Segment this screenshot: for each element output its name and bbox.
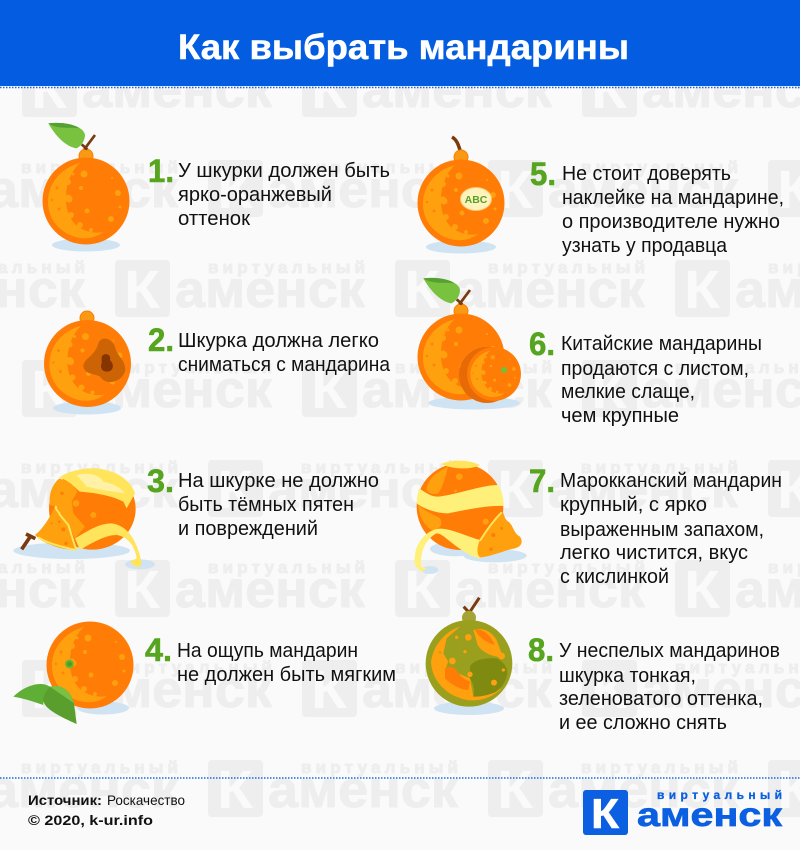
icon: unripe green orange (426, 598, 512, 715)
icon: orange with spiral peel (414, 461, 527, 574)
text 7: выраженным запахом, (560, 518, 764, 541)
text 4: На ощупь мандарин (177, 639, 358, 662)
logo: К (591, 790, 619, 837)
number 1: 1. (148, 153, 174, 189)
text 6: мелкие слаще, (561, 380, 695, 403)
sticker: ABC (465, 194, 488, 206)
number 7: 7. (529, 463, 555, 499)
footer source: Роскачество (107, 792, 185, 808)
icon: orange with leaves (13, 622, 133, 724)
text 2 (178, 329, 391, 376)
text 3: быть тёмных пятен (178, 493, 354, 516)
text 8 (559, 639, 780, 734)
text 5: узнать у продавца (562, 234, 728, 257)
text 4 (177, 639, 396, 686)
text 3: и повреждений (178, 517, 318, 540)
text 6: чем крупные (561, 404, 679, 427)
text 1 (178, 159, 390, 230)
icon: orange with ABC sticker (418, 137, 504, 254)
icon: orange with leaf (42, 123, 130, 252)
text 6 (561, 332, 762, 427)
logo (583, 788, 783, 837)
logo: аменск (637, 796, 783, 833)
text 1: У шкурки должен быть (178, 159, 390, 182)
icon: two oranges with leaf (418, 278, 521, 410)
icon: orange with peel spot (44, 311, 131, 414)
text 5: о производителе нужно (562, 210, 780, 233)
text 6: Китайские мандарины (561, 332, 762, 355)
item 1 (42, 123, 390, 252)
text 5 (562, 162, 784, 257)
text 7: с кислинкой (560, 565, 669, 588)
text 7 (560, 469, 782, 588)
footer source: Источник: (28, 792, 102, 808)
text 8: шкурка тонкая, (559, 664, 696, 687)
logo: виртуальный (657, 788, 782, 802)
item 5 (418, 137, 784, 257)
text 5: наклейке на мандарине, (562, 186, 784, 209)
title: Как выбрать мандарины (178, 28, 629, 67)
item 3 (13, 463, 379, 569)
text 7: легко чистится, вкус (560, 541, 748, 564)
header bar (0, 0, 800, 86)
text 7: Марокканский мандарин (560, 469, 782, 492)
text 2: сниматься с мандарина (178, 353, 391, 376)
item 6 (418, 278, 762, 427)
text 4: не должен быть мягким (177, 663, 396, 686)
number 4: 4. (145, 632, 172, 668)
text 1: оттенок (178, 207, 251, 230)
text 3: На шкурке не должно (178, 469, 379, 492)
item 2 (44, 311, 391, 414)
text 6: продаются с листом, (561, 357, 749, 380)
footer source: © 2020, k-ur.info (28, 812, 153, 828)
text 5: Не стоит доверять (562, 162, 731, 185)
item 8 (426, 598, 780, 734)
text 1: ярко-оранжевый (178, 183, 332, 206)
number 8: 8. (528, 632, 554, 668)
number 3: 3. (147, 463, 174, 499)
text 8: зеленоватого оттенка, (559, 687, 763, 710)
text 8: и ее сложно снять (559, 711, 727, 734)
icon: peeled orange (13, 468, 155, 569)
number 2: 2. (148, 322, 174, 358)
text 3 (178, 469, 379, 540)
text 8: У неспелых мандаринов (559, 639, 780, 662)
text 7: крупный, с ярко (560, 493, 707, 516)
number 6: 6. (529, 326, 555, 362)
item 7 (414, 461, 782, 588)
text 2: Шкурка должна легко (178, 329, 379, 352)
item 4 (13, 622, 396, 724)
number 5: 5. (530, 156, 556, 192)
footer source (28, 792, 185, 828)
